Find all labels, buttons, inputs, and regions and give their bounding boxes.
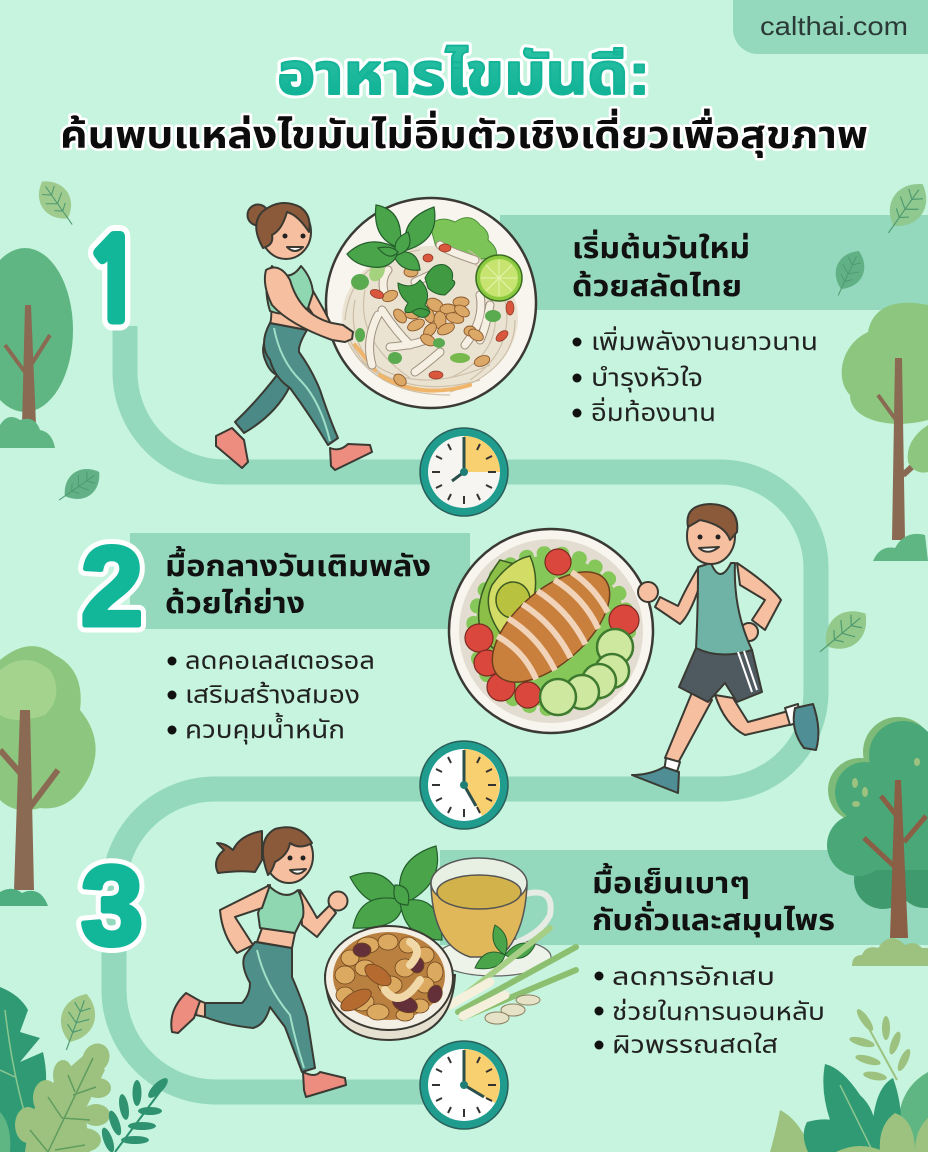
number 2: 2: [81, 524, 143, 649]
nut bowl: [325, 975, 455, 1040]
number 2: 2: [81, 524, 143, 649]
step 2 heading: [165, 545, 431, 620]
chicken breast: [473, 552, 629, 702]
nuts: [335, 934, 445, 1021]
noodle mound: [342, 246, 518, 390]
banner 2: [130, 533, 470, 629]
nuts, tea and herbs: [325, 846, 576, 1040]
title: อาหารไขมันดี:: [277, 42, 650, 107]
step 3 bullets: ช่วยในการนอนหลับ: [612, 998, 825, 1026]
basil leaves: [347, 205, 435, 270]
number 1: 1: [84, 226, 144, 337]
leaf: right: [826, 245, 871, 301]
man running: [632, 504, 818, 793]
clock 3: [420, 1041, 508, 1129]
step 3 bullets: [594, 963, 825, 1059]
saucer: [437, 938, 551, 976]
orange carrot: [355, 345, 470, 391]
cucumbers: [540, 629, 633, 715]
oak leaf: [15, 1039, 115, 1152]
step 1 heading: ด้วยสลัดไทย: [572, 271, 742, 303]
step 2 bullets: [168, 647, 375, 745]
basil: [350, 846, 442, 940]
shredded chicken: [370, 245, 490, 372]
website tab: [733, 0, 928, 54]
lemongrass slices: [485, 995, 540, 1024]
peanuts: [381, 267, 491, 388]
leaf: top left: [30, 173, 84, 233]
step 1 heading: [572, 229, 750, 303]
tomatoes: [465, 549, 639, 708]
chilies: [369, 244, 514, 379]
title: [60, 42, 868, 158]
tree: upper left: [0, 248, 73, 448]
step 3 heading: กับถั่วและสมุนไพร: [592, 900, 835, 937]
leaf: lower left: [51, 988, 102, 1056]
number 3: 3: [81, 843, 143, 968]
step 3 heading: [592, 862, 835, 937]
step 3 bullets: ผิวพรรณสดใส: [612, 1031, 778, 1059]
tree: upper right: [842, 303, 928, 561]
title: อาหารไขมันดี:: [277, 42, 650, 107]
banner 3: [440, 850, 928, 945]
step 1 bullets: อิ่มท้องนาน: [591, 396, 716, 427]
foliage: bottom right: [770, 1007, 928, 1152]
step 2 heading: มื้อกลางวันเติมพลัง: [165, 545, 431, 583]
lime: [476, 255, 522, 301]
winding path connecting the steps: [114, 326, 816, 1092]
leaf: mid right: [809, 601, 876, 665]
step 1 bullets: เพิ่มพลังงานยาวนาน: [591, 325, 818, 356]
tree: lower right: [827, 717, 928, 966]
lemongrass: [450, 928, 576, 1018]
step 1 heading: เริ่มต้นวันใหม่: [572, 229, 750, 265]
green bits: [351, 260, 501, 364]
step 2 bullets: ควบคุมน้ำหนัก: [185, 712, 345, 745]
title: ค้นพบแหล่งไขมันไม่อิ่มตัวเชิงเดี่ยวเพื่อสุขภาพ: [60, 108, 868, 158]
mint: [475, 925, 535, 969]
step 3 bullets: ลดการอักเสบ: [612, 963, 775, 991]
number 1: 1: [84, 226, 144, 337]
foliage: bottom left: [0, 987, 171, 1152]
step 2 bullets: ลดคอเลสเตอรอล: [185, 647, 375, 675]
clock 1: [420, 428, 508, 516]
step 2 heading: ด้วยไก่ย่าง: [165, 588, 305, 620]
clock 2: [420, 741, 508, 829]
leaf: mid left: [51, 461, 107, 511]
number 3: 3: [81, 843, 143, 968]
glass noodles: [345, 250, 515, 395]
step 2 bullets: เสริมสร้างสมอง: [185, 681, 360, 709]
avocados: [479, 556, 536, 654]
tree: lower left: [0, 646, 96, 906]
website tab: calthai.com: [760, 11, 908, 41]
tea cup: [431, 858, 551, 957]
banner 1: [500, 215, 928, 310]
woman carrying plate: [216, 203, 372, 470]
lettuce: [430, 218, 496, 262]
step 1 bullets: บำรุงหัวใจ: [591, 364, 703, 393]
cilantro: [398, 265, 455, 318]
woman running: [171, 827, 348, 1097]
step 3 heading: มื้อเย็นเบาๆ: [592, 862, 750, 900]
plate: Thai salad: [326, 198, 536, 408]
leaf: top right: [875, 175, 928, 242]
plate: grilled chicken salad: [449, 529, 653, 733]
step 1 bullets: [572, 325, 818, 427]
fern: [99, 1075, 171, 1152]
